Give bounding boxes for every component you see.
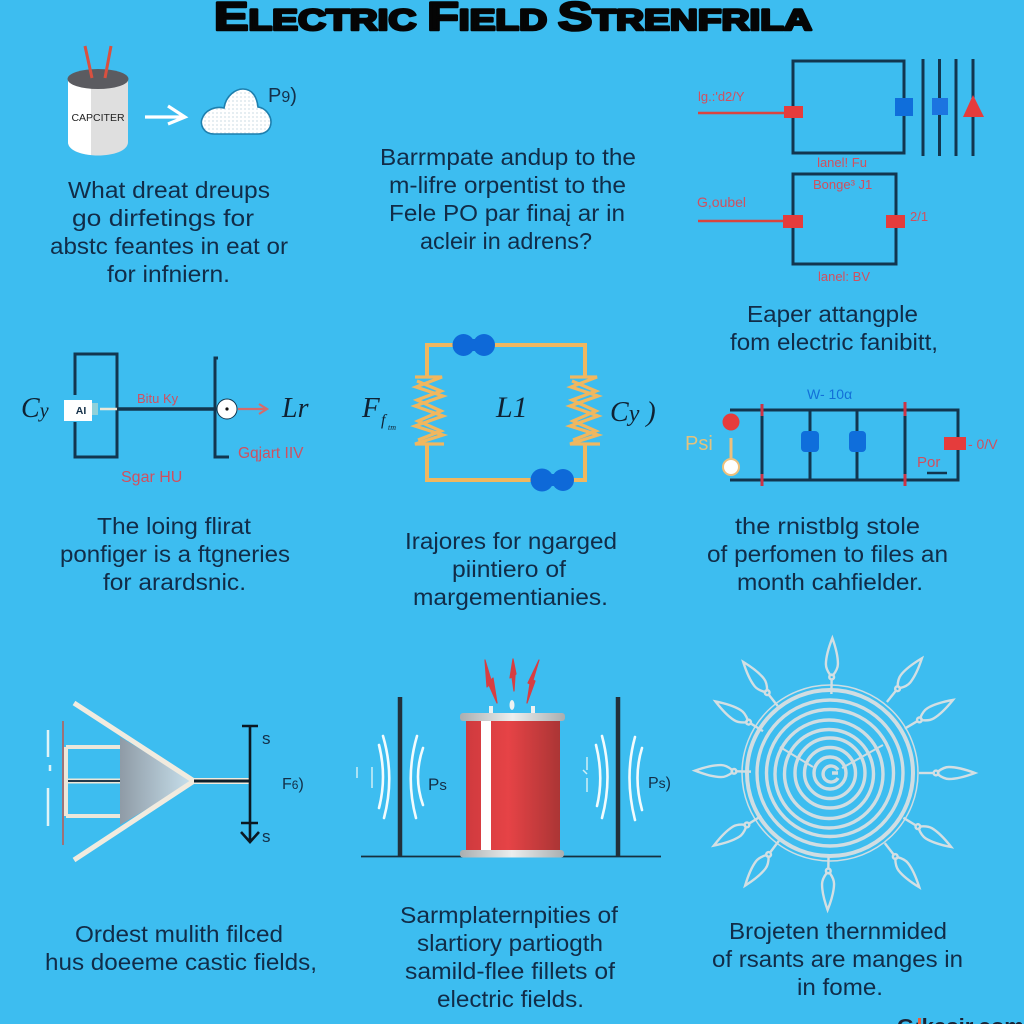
- text block: row 3 col 1: [45, 921, 317, 975]
- text block: row 2 col 3: of perfomen to files an: [707, 541, 948, 567]
- panel: coil loop circuit: L1: [495, 391, 528, 424]
- text block: row 1 col 3: [730, 301, 938, 355]
- text block: row 1 col 2: acleir in adrens?: [420, 228, 592, 254]
- text block: row 2 col 3: [707, 513, 948, 595]
- text block: row 3 col 3: in fome.: [797, 974, 883, 1000]
- text block: row 2 col 2: [405, 528, 617, 610]
- text block: row 2 col 1: for arardsnic.: [103, 569, 246, 595]
- text block: row 1 col 1: abstc feantes in eat or: [50, 233, 288, 259]
- text block: row 3 col 2: electric fields.: [437, 986, 584, 1012]
- panel: circuit with module: [21, 354, 309, 486]
- panel: coil loop circuit: Cy ): [610, 397, 656, 428]
- panel: coil loop circuit: [361, 334, 656, 492]
- panel: coil loop circuit: tm: [388, 423, 396, 432]
- axis: [241, 726, 259, 842]
- cloud label: P9): [268, 85, 297, 107]
- panel: coil loop circuit: f: [381, 412, 388, 429]
- text block: row 1 col 1: [50, 177, 288, 287]
- text block: row 1 col 1: for infniern.: [107, 261, 230, 287]
- text block: row 2 col 1: ponfiger is a ftgneries: [60, 541, 290, 567]
- text block: row 3 col 2: slartiory partiogth: [417, 930, 603, 956]
- lightning bolts: [485, 659, 539, 703]
- coil: left: [415, 377, 444, 444]
- icon: capacitor: CAPCITER: [71, 112, 125, 124]
- text block: row 3 col 3: [712, 918, 963, 1000]
- cone: [120, 737, 194, 825]
- circuit: lower: lanel: BV: [818, 269, 870, 284]
- panel: ladder circuit: - 0/V: [968, 436, 998, 452]
- panel: ladder circuit: W- 10α: [807, 386, 852, 402]
- field arcs: [379, 736, 642, 820]
- text block: row 3 col 1: Ordest mulith filced: [75, 921, 283, 947]
- panel: circuit with module: AI: [76, 405, 86, 417]
- rings: [742, 685, 918, 861]
- text block: row 1 col 3: fom electric fanibitt,: [730, 329, 938, 355]
- text block: row 1 col 2: [380, 144, 636, 254]
- panel: circuit with module: Gqjart IIV: [238, 445, 304, 462]
- circuit: lower: Bonge³ J1: [813, 177, 872, 192]
- panel: capacitor to cloud: [68, 46, 297, 156]
- panel: upper circuits: [697, 59, 984, 284]
- text block: row 2 col 1: [60, 513, 290, 595]
- text block: row 2 col 3: the rnistblg stole: [735, 513, 920, 539]
- panel: coil loop circuit: F: [361, 392, 380, 424]
- circuit: lower: 2/1: [910, 209, 928, 224]
- panel: red capacitor with plates: [357, 659, 671, 858]
- red cylinder: [466, 718, 560, 851]
- text block: row 2 col 3: month cahfielder.: [737, 569, 923, 595]
- panel: circuit with module: Bitu Ky: [137, 391, 179, 406]
- icon: capacitor: [68, 46, 128, 156]
- panel: ladder circuit: Psi: [685, 433, 713, 455]
- text block: row 1 col 2: Fele PO par finaį ar in: [389, 200, 625, 226]
- icon: circle terminal: [217, 399, 237, 419]
- circuit: lower: G,oubel: [697, 194, 746, 210]
- panel: red capacitor with plates: Ps): [648, 775, 671, 792]
- circuit: lower: [697, 174, 928, 284]
- text block: row 2 col 2: Irajores for ngarged: [405, 528, 617, 554]
- coil: right: [570, 377, 600, 444]
- text block: row 3 col 2: Sarmplaternpities of: [400, 902, 619, 928]
- spokes: [695, 638, 975, 910]
- text block: row 3 col 3: of rsants are manges in: [712, 946, 963, 972]
- panel: amplifier cone: F6): [282, 776, 304, 793]
- panel: red capacitor with plates: Ps: [428, 775, 447, 794]
- panel: amplifier cone: [48, 703, 304, 860]
- panel: amplifier cone: s: [262, 729, 270, 748]
- panel: ladder circuit: [685, 386, 998, 486]
- panel: ladder circuit: Por: [917, 454, 940, 471]
- text block: row 2 col 1: The loing flirat: [97, 513, 252, 539]
- text block: row 3 col 3: Brojeten thernmided: [729, 918, 947, 944]
- blue connectors: [452, 334, 574, 492]
- panel: circuit with module: Cy: [21, 393, 49, 424]
- text block: row 3 col 2: samild-flee fillets of: [405, 958, 616, 984]
- module: [64, 400, 92, 421]
- text block: row 1 col 2: Barrmpate andup to the: [380, 144, 636, 170]
- panel: concentric field diagram: [695, 638, 975, 910]
- panel: circuit with module: Sgar HU: [121, 469, 182, 486]
- text block: row 1 col 3: Eaper attangple: [747, 301, 918, 327]
- circuit: top: lanel! Fu: [817, 155, 867, 170]
- icon: cloud: [201, 89, 271, 134]
- text block: row 1 col 1: What dreat dreups: [68, 177, 270, 203]
- arrow: [145, 106, 185, 124]
- switch: [730, 438, 732, 458]
- text block: row 1 col 2: m-lifre orpentist to the: [389, 172, 626, 198]
- text block: row 3 col 1: hus doeeme castic fields,: [45, 949, 317, 975]
- text block: row 3 col 2: [400, 902, 619, 1012]
- circuit: top: lg.:'d2/Y: [698, 89, 745, 104]
- text block: row 2 col 2: piintiero of: [452, 556, 567, 582]
- panel: amplifier cone: s: [262, 827, 270, 846]
- text block: row 1 col 1: go dirfetings for: [72, 205, 254, 231]
- circuit: top: [698, 59, 984, 170]
- arrow: [238, 404, 267, 414]
- text block: row 2 col 2: margementianies.: [413, 584, 608, 610]
- small marks: [48, 730, 50, 826]
- panel: circuit with module: Lr: [281, 393, 309, 424]
